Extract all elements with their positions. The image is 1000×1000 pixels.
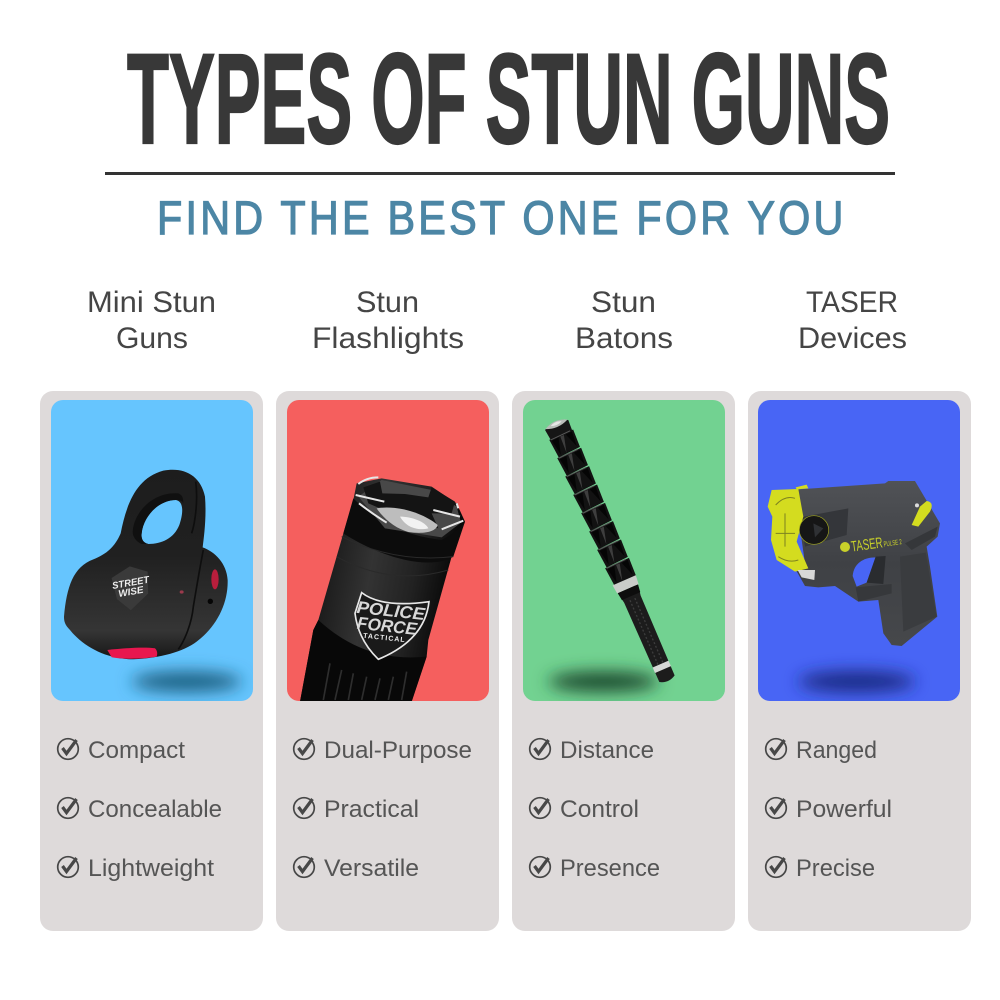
panel: stun flashlights <box>276 391 499 931</box>
feature list: Powerful <box>796 796 892 823</box>
logo: Police Force Tactical <box>353 593 429 659</box>
heading: Mini Stun Guns: Guns <box>116 322 188 355</box>
heading: TASER Devices: TASER <box>806 286 898 319</box>
panel: mini stun guns <box>40 391 263 931</box>
heading: Stun Batons <box>575 286 673 355</box>
feature list: Concealable <box>88 796 222 823</box>
logo: Taser Pulse 2 <box>840 538 902 552</box>
feature list: Lightweight <box>88 855 214 882</box>
heading: TASER Devices <box>798 286 907 355</box>
heading: Mini Stun Guns: Mini Stun <box>87 286 216 319</box>
feature list: Distance <box>560 737 654 764</box>
logo: Taser Pulse 2: TASER <box>850 534 884 556</box>
feature list <box>294 737 472 882</box>
logo: Street Wise: WISE <box>118 585 145 600</box>
heading: Stun Flashlights <box>312 286 464 355</box>
icon: stun flashlight <box>300 477 465 702</box>
feature list: Ranged <box>796 737 877 764</box>
heading: Stun Flashlights: Flashlights <box>312 322 464 355</box>
logo: Street Wise: STREET <box>111 574 151 592</box>
logo: Police Force Tactical: POLICE <box>356 597 426 624</box>
logo: Taser Pulse 2: PULSE 2 <box>883 537 902 549</box>
heading: Stun Batons: Stun <box>591 286 656 319</box>
feature list: Dual-Purpose <box>324 737 472 764</box>
feature list: Versatile <box>324 855 419 882</box>
icon: taser device <box>768 481 940 692</box>
logo: Street Wise <box>112 566 150 610</box>
icon: stun baton <box>543 416 680 692</box>
panel: taser devices <box>748 391 971 931</box>
feature list: Control <box>560 796 639 823</box>
feature list: Practical <box>324 796 419 823</box>
heading: Mini Stun Guns <box>87 286 216 355</box>
logo: Police Force Tactical: FORCE <box>356 613 418 639</box>
feature list <box>58 737 222 882</box>
feature list: Compact <box>88 737 185 764</box>
heading: Stun Flashlights: Stun <box>356 286 419 319</box>
subtitle: FIND THE BEST ONE FOR YOU <box>157 193 843 245</box>
panel: stun batons <box>512 391 735 931</box>
feature list <box>530 737 660 882</box>
feature list: Precise <box>796 855 875 882</box>
feature list: Presence <box>560 855 660 882</box>
feature list <box>766 737 892 882</box>
heading: Stun Batons: Batons <box>575 322 673 355</box>
heading: TASER Devices: Devices <box>798 322 907 355</box>
icon: mini stun gun <box>64 470 242 692</box>
logo: Police Force Tactical: TACTICAL <box>363 633 406 644</box>
